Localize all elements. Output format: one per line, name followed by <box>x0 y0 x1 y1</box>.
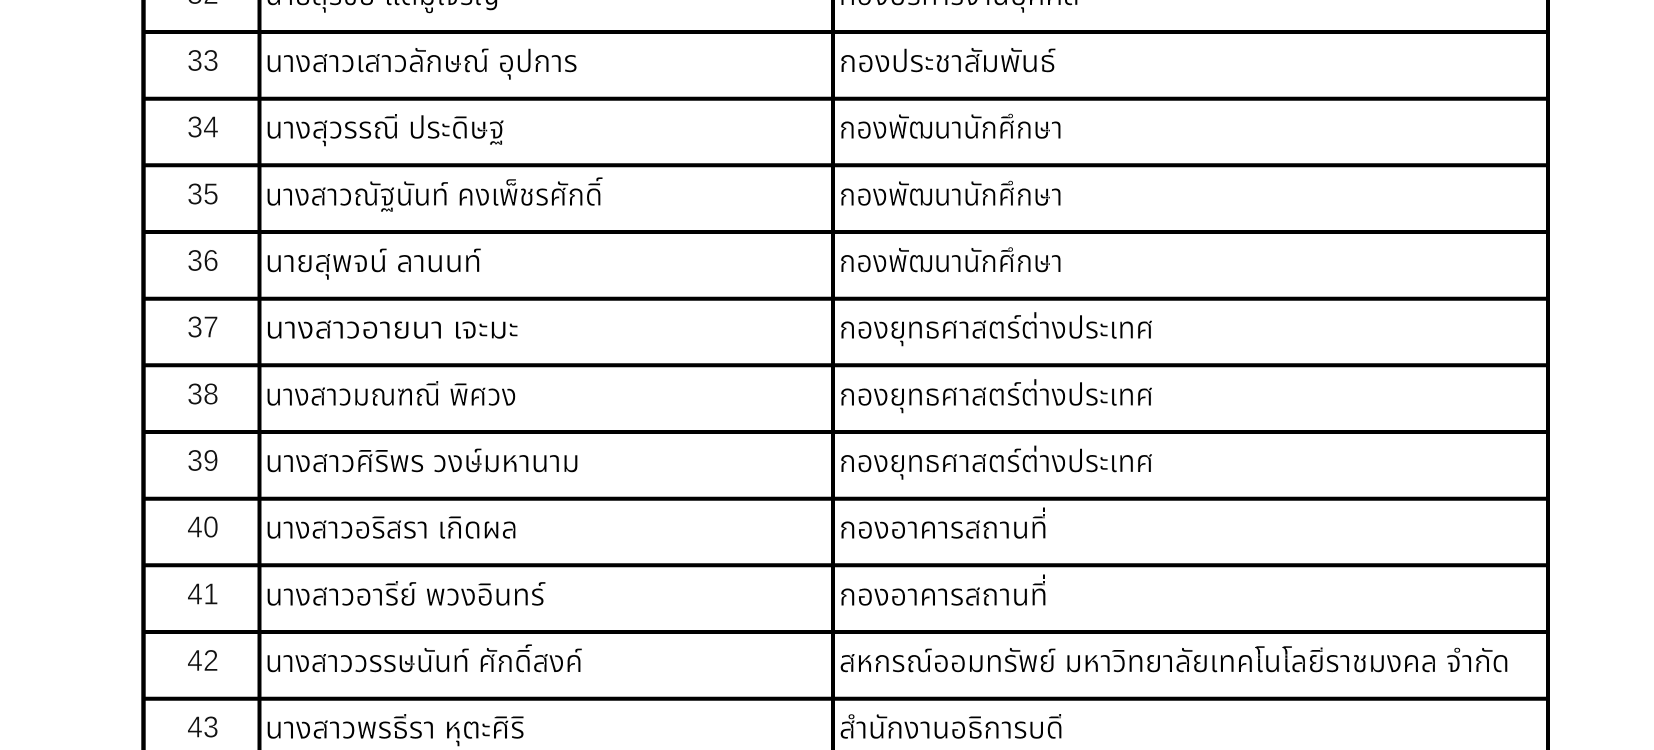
row 42 <box>187 643 1510 679</box>
row 38: กองยุทธศาสตร์ต่างประเทศ <box>839 377 1154 413</box>
row 35: กองพัฒนานักศึกษา <box>839 177 1063 212</box>
row 39: กองยุทธศาสตร์ต่างประเทศ <box>839 444 1154 480</box>
row 38: 38 <box>187 376 219 411</box>
row 39 <box>187 443 1154 480</box>
row 40: กองอาคารสถานที่ <box>839 507 1048 546</box>
row 41: กองอาคารสถานที่ <box>839 573 1048 612</box>
row 35: 35 <box>187 176 219 211</box>
row 38: นางสาวมณฑณี พิศวง <box>265 377 517 412</box>
row 43: 43 <box>187 710 219 745</box>
row 36: นายสุพจน์ ลานนท์ <box>265 244 482 280</box>
row 43 <box>187 710 1064 747</box>
row 37 <box>187 310 1154 347</box>
row 36: 36 <box>187 243 219 278</box>
row 41: 41 <box>187 576 219 611</box>
row 41 <box>187 573 1048 612</box>
row 36: กองพัฒนานักศึกษา <box>839 244 1063 279</box>
row 33 <box>187 43 1057 80</box>
row 36 <box>187 243 1063 280</box>
row 33: นางสาวเสาวลักษณ์ อุปการ <box>265 44 578 80</box>
row 43: สำนักงานอธิการบดี <box>839 711 1064 746</box>
row 41: นางสาวอารีย์ พวงอินทร์ <box>265 577 546 612</box>
row 40: นางสาวอริสรา เกิดผล <box>265 511 518 546</box>
row 40: 40 <box>187 510 219 545</box>
row 35 <box>187 176 1063 212</box>
row 34: 34 <box>187 110 219 145</box>
row 42: นางสาววรรษนันท์ ศักดิ์สงค์ <box>265 644 583 679</box>
row 34 <box>187 110 1063 147</box>
row 33: กองประชาสัมพันธ์ <box>839 44 1057 79</box>
row 42: 42 <box>187 643 219 678</box>
row 37: กองยุทธศาสตร์ต่างประเทศ <box>839 311 1154 347</box>
row 38 <box>187 376 1154 413</box>
row 34: นางสุวรรณี ประดิษฐ <box>265 111 505 147</box>
row 39: 39 <box>187 443 219 478</box>
row 34: กองพัฒนานักศึกษา <box>839 111 1063 146</box>
row 43: นางสาวพรธีรา หุตะศิริ <box>265 711 525 747</box>
row 32 <box>187 0 1080 13</box>
row 40 <box>187 507 1048 546</box>
row 42: สหกรณ์ออมทรัพย์ มหาวิทยาลัยเทคโนโลยีราชมงคล จำกัด <box>839 644 1510 679</box>
row 33: 33 <box>187 43 219 78</box>
row 37: 37 <box>187 310 219 345</box>
row 37: นางสาวอายนา เจะมะ <box>265 311 519 346</box>
row 35: นางสาวณัฐนันท์ คงเพ็ชรศักดิ์ <box>265 177 603 212</box>
row 39: นางสาวศิริพร วงษ์มหานาม <box>265 444 580 479</box>
